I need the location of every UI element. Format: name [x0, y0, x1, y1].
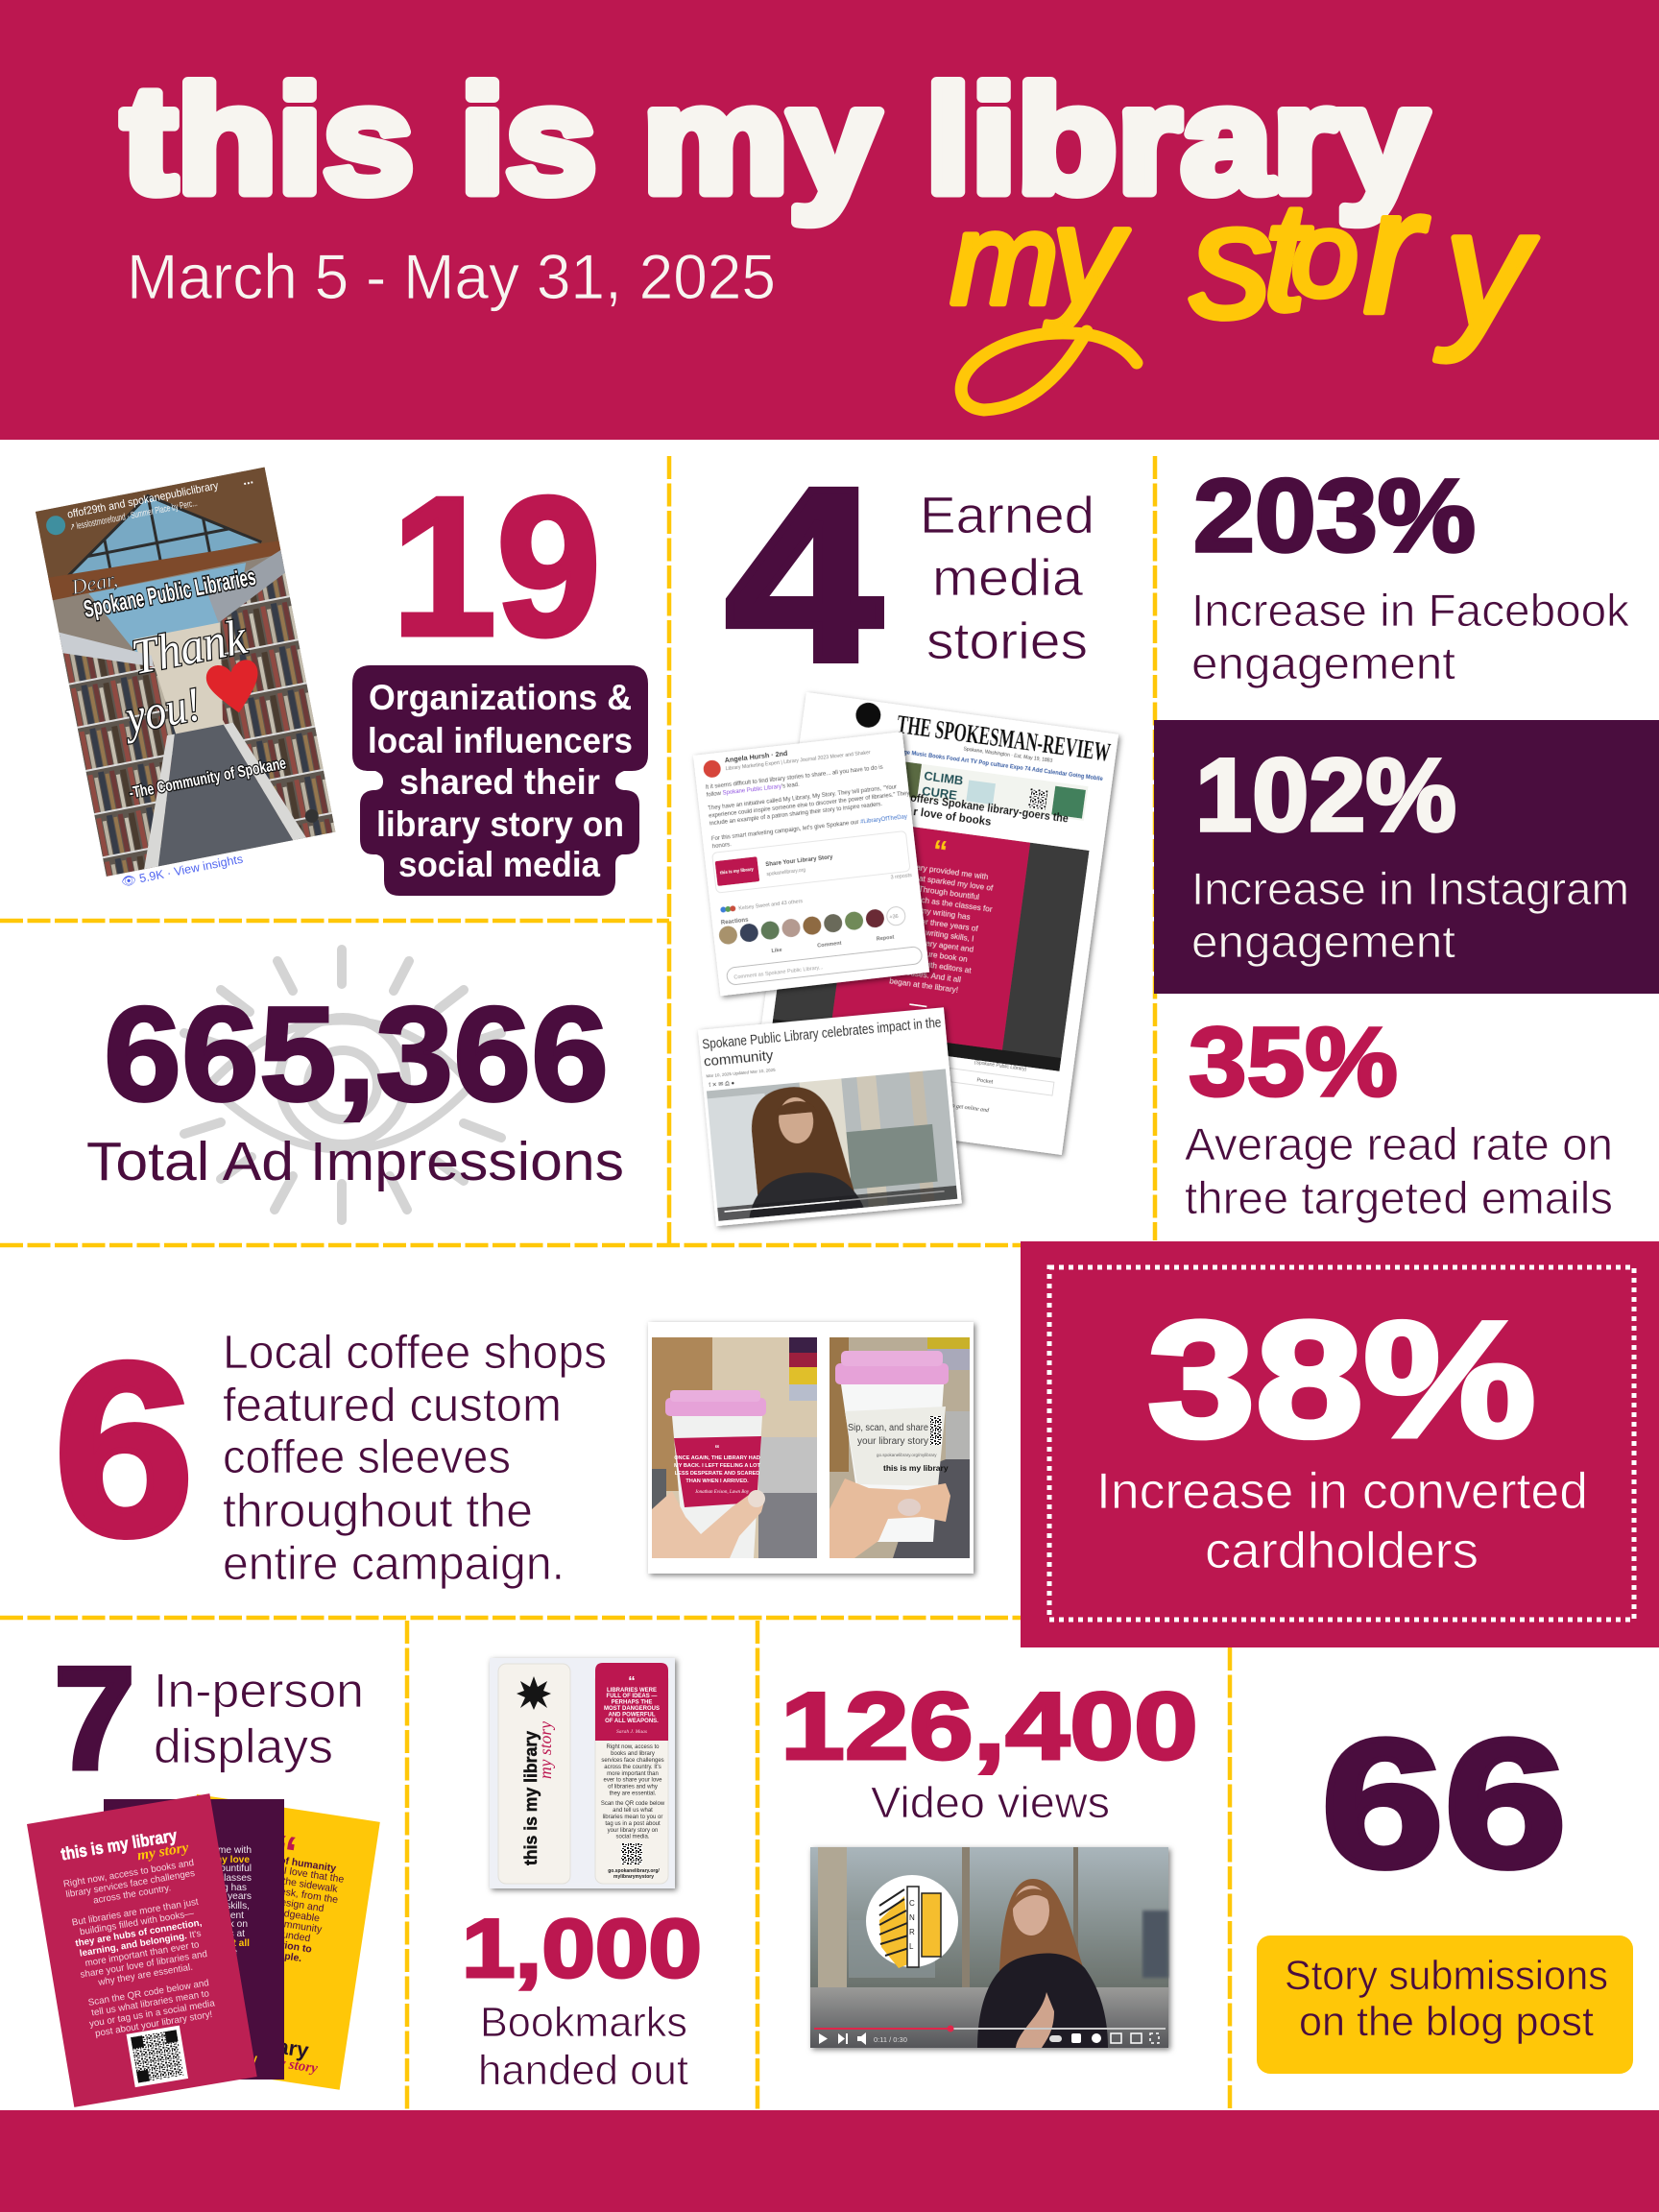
callout: organizations and influencers — [352, 665, 648, 896]
photo: white sleeve cup: your library story — [857, 1436, 928, 1447]
photo: crimson sleeve cup — [652, 1337, 817, 1558]
card: yellow quote: practical design and — [234, 1889, 325, 1914]
stat: total ad impressions: 665,366 — [104, 978, 609, 1129]
photo: bookmark: they are essential. — [610, 1791, 657, 1797]
media collage — [693, 692, 1118, 1226]
video still — [810, 1847, 1168, 2048]
photo: crimson sleeve cup: “ — [714, 1444, 720, 1455]
photo: bookmark: FULL OF IDEAS — — [607, 1694, 657, 1699]
card: crimson campaign: But libraries are more than just — [71, 1897, 200, 1929]
card: crimson campaign: post about your library story! — [94, 2009, 213, 2039]
social post: angela hursh: It it seems difficult to find library stories to share... all you have to do is — [706, 765, 883, 791]
social post: angela hursh: Comment — [817, 941, 842, 950]
panel: instagram story photo: Thank — [128, 610, 252, 685]
icon: central library logo: R — [909, 1928, 915, 1936]
card: purple quote: and a future book on — [158, 1919, 248, 1930]
footer band — [0, 2110, 1659, 2212]
card: crimson campaign: across the country. — [92, 1883, 172, 1907]
script subtitle: my story: m — [950, 186, 1058, 331]
callout: story submissions: on the blog post — [1299, 1999, 1594, 2045]
newspaper clipping: the spokesman-review: THE SPOKESMAN-REVIEW — [895, 709, 1112, 767]
panel: 102 percent instagram — [1154, 720, 1659, 994]
news video story: community — [703, 1047, 775, 1070]
photo: white sleeve cup: Sip, scan, and share — [848, 1423, 928, 1433]
newspaper clipping: the spokesman-review: The library provided me with — [890, 859, 989, 881]
script subtitle: my story: r — [1363, 153, 1429, 350]
stat: 4 earned media stories: 4 — [726, 438, 881, 712]
card: crimson campaign — [27, 1793, 257, 2107]
photo: bookmark: ever to share your love — [603, 1778, 662, 1784]
photo: bookmark: PERHAPS THE — [612, 1699, 652, 1705]
card: purple quote: for teens, my writing has — [141, 1883, 247, 1893]
card: purple quote: of honing my skills, — [167, 1901, 250, 1911]
stat: 6 coffee shops: featured custom — [223, 1380, 562, 1431]
social post: angela hursh: For this smart marketing campaign, let's give Spokane our #LibraryOfTheDay — [711, 814, 907, 842]
social post: angela hursh: Reactions — [721, 918, 749, 926]
newspaper clipping: the spokesman-review: Spokane Public Library invites you to get online and — [868, 1092, 990, 1114]
stat: 7 in-person displays — [54, 1637, 364, 1800]
social post: angela hursh — [693, 732, 930, 996]
icon: central library logo: N — [909, 1913, 915, 1922]
panel: 38 percent converted cardholders: 38% — [1147, 1287, 1536, 1472]
panel: instagram story photo: offof29th and spokanepubliclibrary — [66, 480, 220, 521]
social post: angela hursh: Comment as Spokane Public Library... — [733, 965, 824, 981]
photo: bookmark: your library story on — [608, 1828, 658, 1834]
panel: instagram story photo: Spokane Public Libraries — [82, 564, 258, 623]
newspaper clipping: the spokesman-review: found a literary agent and — [884, 933, 974, 954]
social post: angela hursh: honors. — [712, 842, 732, 850]
icon: star flower — [517, 1676, 551, 1710]
social post: angela hursh: They have an initiative called My Library, My Story. They tell patrons, "Your — [708, 784, 897, 812]
card: purple quote: started here — [185, 1947, 237, 1958]
qr code — [127, 2026, 188, 2087]
panel: instagram story photo: ... — [241, 471, 254, 488]
photo: bookmark: Right now, access to — [606, 1744, 660, 1750]
photo: bookmark: Scan the QR code below — [601, 1801, 665, 1807]
photo: crimson sleeve cup: Jonathan Evison, Lawn Boy — [695, 1490, 750, 1495]
dashed section dividers — [0, 456, 1230, 2110]
stat: 7 in-person displays: displays — [154, 1719, 333, 1773]
card: purple quote: big houses. And it all — [152, 1938, 250, 1949]
stat: 203 percent facebook: engagement — [1191, 637, 1455, 688]
stat: 6 coffee shops: 6 — [54, 1312, 194, 1587]
stat: 4 earned media stories: stories — [926, 613, 1088, 670]
social post: angela hursh: spokanelibrary.org — [766, 868, 806, 878]
stat: 1,000 bookmarks: Bookmarks — [480, 1999, 687, 2046]
newspaper clipping: the spokesman-review: Pocket — [976, 1077, 994, 1086]
newspaper clipping: the spokesman-review: (Spokane Public Library) — [974, 1060, 1027, 1072]
newspaper clipping: the spokesman-review — [750, 692, 1118, 1155]
newspaper clipping: the spokesman-review: books. Through bountiful — [893, 881, 980, 902]
card: yellow quote: staff, is a community — [230, 1911, 324, 1936]
photo: bookmark: go.spokanelibrary.org/ — [608, 1868, 660, 1874]
photo: speaker — [977, 1879, 1108, 2048]
photo: bookmark: AND POWERFUL — [609, 1713, 656, 1719]
photo: bookmark: MOST DANGEROUS — [604, 1706, 660, 1712]
callout: organizations and influencers: social media — [398, 845, 600, 884]
icon: central library logo — [866, 1875, 958, 1968]
newspaper clipping: the spokesman-review: family celebration. Simply tag — [865, 1109, 935, 1125]
card: yellow quote: the knowledgeable — [235, 1901, 321, 1925]
newspaper clipping: the spokesman-review: big houses. And it all — [889, 966, 962, 984]
card: crimson campaign: learning, and belonging. It's — [79, 1929, 202, 1960]
stat: 1,000 bookmarks — [462, 1903, 702, 2094]
card: crimson campaign: this is my library — [60, 1826, 179, 1863]
newspaper clipping: the spokesman-review: YESSENIA — [903, 1016, 931, 1024]
photo: bookmark: of libraries and why — [608, 1784, 658, 1790]
icon: central library logo: C — [909, 1899, 915, 1908]
panel: instagram story photo: Dear, — [68, 566, 119, 599]
photo: crimson sleeve cup: MY BACK. I LEFT FEELING A LOT — [674, 1463, 761, 1469]
script subtitle: my story: o — [1291, 188, 1358, 322]
social post: angela hursh: follow Spokane Public Library's lead. — [706, 782, 800, 799]
title: this is my library: this is my library — [122, 56, 1428, 225]
callout: story submissions: Story submissions — [1285, 1953, 1608, 1999]
card: purple quote: a space that sparked my love — [113, 1855, 250, 1865]
stat: 35 percent email read rate: three targeted emails — [1185, 1172, 1613, 1223]
social post: angela hursh: include an example of a patron sharing their story to inspire readers. — [709, 802, 883, 827]
callout: story submissions — [1257, 1936, 1633, 2074]
card: yellow quote: my story — [267, 2054, 319, 2077]
card: yellow quote: library, from the sidewalk — [228, 1867, 339, 1895]
stat: 203 percent facebook — [1191, 457, 1630, 688]
card: yellow quote: are a spark of humanity — [224, 1846, 337, 1875]
card: crimson campaign: share your love of libraries and — [80, 1949, 208, 1981]
photo: bookmark: services face challenges — [601, 1758, 664, 1764]
display cards — [27, 1793, 380, 2107]
script subtitle: my story: t — [1263, 170, 1311, 342]
news video story: Mar 10, 2025 Updated Mar 10, 2025 — [706, 1068, 776, 1078]
header band — [0, 0, 1659, 440]
card: crimson campaign: they are hubs of connection, — [75, 1917, 203, 1949]
card: crimson campaign: why they are essential. — [97, 1962, 194, 1988]
newspaper clipping: the spokesman-review: CLIMB — [923, 768, 964, 788]
news video story: Spokane Public Library celebrates impact in the — [702, 1015, 942, 1053]
video player controls: 0:11 / 0:30 — [874, 2035, 907, 2044]
stat: 1,000 bookmarks: handed out — [478, 2047, 688, 2094]
social post: angela hursh: +36 — [889, 914, 899, 921]
card: purple quote: of books. Through bountiful — [133, 1863, 252, 1874]
card: yellow quote — [156, 1794, 380, 2090]
photo: bookmark: across the country. It's — [604, 1765, 661, 1770]
newspaper clipping: the spokesman-review: Stage Music Books Food Art TV Pop culture Expo 74 Add Calendar Going Mobile — [895, 748, 1103, 782]
photo: bookmark: my story — [536, 1721, 555, 1779]
newspaper clipping: the spokesman-review: Spokane, Washington · Est. May 19, 1883 — [963, 746, 1053, 764]
card: yellow quote: library — [243, 2029, 311, 2062]
script subtitle: my story — [950, 153, 1538, 410]
panel: 102 percent instagram: Increase in Instagram — [1191, 863, 1629, 914]
script subtitle: my story: y — [1435, 176, 1538, 363]
card: crimson campaign: library services face challenges — [65, 1868, 196, 1900]
stat: 4 earned media stories: Earned — [920, 487, 1094, 544]
photo: bookmark: libraries mean to you or — [603, 1815, 662, 1820]
stat: 35 percent email read rate: Average read rate on — [1185, 1118, 1613, 1169]
newspaper clipping: the spokesman-review: began at the library! — [889, 976, 959, 995]
photo: bookmark: social media. — [615, 1834, 650, 1839]
card: purple quote — [104, 1799, 284, 2080]
social post: angela hursh: experience could inspire someone else to discover the power of libraries." They — [709, 791, 910, 820]
photo: coffee cups — [648, 1322, 974, 1574]
photo: bookmark: tag us in a post about — [605, 1821, 661, 1827]
stat: 4 earned media stories: media — [932, 549, 1084, 607]
stat: 6 coffee shops: entire campaign. — [223, 1538, 565, 1590]
card: crimson campaign: Right now, access to books and — [62, 1858, 195, 1890]
caption: view insights: 👁 5.9K · View insights — [120, 853, 244, 889]
newspaper clipping: the spokesman-review: teens, my writing has — [897, 903, 971, 922]
script subtitle: my story: y — [1044, 178, 1129, 333]
news video story: f ✕ ✉ ⎙ ● — [709, 1080, 735, 1089]
card: purple quote: The library provided me with — [129, 1845, 252, 1856]
card: yellow quote: in our towns. I love that the — [224, 1856, 345, 1886]
stat: 7 in-person displays: 7 — [54, 1637, 135, 1800]
stat: 203 percent facebook: Increase in Facebook — [1191, 585, 1630, 636]
photo: bookmark: more important than — [607, 1771, 659, 1777]
callout: organizations and influencers: Organizations & — [369, 678, 632, 717]
social post: angela hursh: this is my library — [720, 867, 755, 876]
stat: 203 percent facebook: 203% — [1193, 457, 1476, 573]
photo: bookmark — [490, 1658, 675, 1888]
photo: bookmark: Sarah J. Maas — [616, 1729, 647, 1735]
photo: bookmark: this is my library — [520, 1730, 541, 1865]
stat: 6 coffee shops — [54, 1312, 607, 1590]
newspaper clipping: the spokesman-review: “ — [930, 834, 950, 868]
card: yellow quote: with intention to — [233, 1933, 313, 1956]
stat: 126,400 video views: Video views — [871, 1778, 1110, 1827]
stat: 1,000 bookmarks: 1,000 — [462, 1903, 702, 1995]
stat: 126,400 video views — [781, 1672, 1198, 1827]
panel: instagram story photo: -The Community of Spokane — [128, 754, 288, 803]
newspaper clipping: the spokesman-review: r love of books — [912, 806, 992, 829]
newspaper clipping: the spokesman-review: have a picture book on — [888, 945, 969, 964]
card: crimson campaign: more important than ever to — [84, 1939, 201, 1969]
stat: 35 percent email read rate: 35% — [1189, 1007, 1398, 1117]
newspaper clipping: the spokesman-review: grown. After three years of — [886, 912, 979, 933]
card: purple quote: programs, such as the classes — [119, 1873, 252, 1884]
photo: crimson sleeve cup: ONCE AGAIN, THE LIBRARY HAD — [674, 1455, 760, 1461]
newspaper clipping: the spokesman-review: honing my writing skills, I — [887, 924, 974, 944]
icon: central library logo: L — [909, 1942, 914, 1951]
script subtitle: my story: s — [1190, 170, 1272, 352]
newspaper clipping: the spokesman-review: submission with editors at — [881, 954, 973, 975]
callout: organizations and influencers: shared their — [399, 762, 600, 802]
card: purple quote: grown. After three years — [148, 1891, 252, 1902]
icon: eye — [184, 950, 501, 1220]
newspaper clipping: the spokesman-review: CURE — [921, 783, 958, 803]
panel: 102 percent instagram: engagement — [1191, 916, 1455, 967]
photo: bookmark: and tell us what — [613, 1808, 653, 1814]
card: crimson campaign: my story — [136, 1840, 190, 1863]
photo: bookmark: “ — [628, 1673, 636, 1690]
callout: organizations and influencers: local influencers — [368, 721, 633, 760]
social post: angela hursh: Like — [771, 948, 782, 954]
social post: angela hursh: 3 reposts — [890, 873, 912, 881]
panel: 38 percent converted cardholders: cardholders — [1205, 1523, 1479, 1579]
video player controls — [814, 2026, 1166, 2045]
photo: crimson sleeve cup: THAN WHEN I ARRIVED. — [685, 1479, 749, 1484]
stat: 4 earned media stories — [726, 438, 1094, 712]
stat: 126,400 video views: 126,400 — [781, 1672, 1198, 1779]
social post: angela hursh: Library Marketing Expert | Library Journal 2023 Mover and Shaker — [725, 750, 871, 772]
panel: 38 percent converted cardholders: Increase in converted — [1096, 1463, 1588, 1520]
photo: bookmark: LIBRARIES WERE — [607, 1688, 657, 1694]
stat: 35 percent email read rate — [1185, 1007, 1613, 1223]
panel: instagram story photo: you! — [117, 677, 204, 744]
card: purple quote: submission with editors at — [132, 1929, 245, 1939]
photo: bookmark: OF ALL WEAPONS. — [605, 1719, 659, 1724]
newspaper clipping: the spokesman-review: offers Spokane library-goers the — [909, 793, 1069, 826]
panel: 102 percent instagram: 102% — [1195, 736, 1456, 853]
social post: angela hursh: Repost — [877, 935, 895, 943]
photo: white sleeve cup — [830, 1337, 970, 1558]
stat: 6 coffee shops: throughout the — [223, 1485, 533, 1537]
panel: instagram story photo — [36, 468, 335, 889]
photo: white sleeve cup: go.spokanelibrary.org/mylibrary — [877, 1453, 937, 1457]
social post: angela hursh: Share Your Library Story — [765, 854, 833, 868]
panel: 38 percent converted cardholders — [1021, 1241, 1659, 1647]
campaign dates: March 5 - May 31, 2025 — [127, 241, 776, 312]
stat: 6 coffee shops: Local coffee shops — [223, 1327, 607, 1379]
card: yellow quote: serve people. — [237, 1943, 302, 1964]
photo: crimson sleeve cup: LESS DESPERATE AND SCARED — [675, 1471, 759, 1477]
photo: white sleeve cup: this is my library — [883, 1463, 949, 1473]
photo: bookmark: books and library — [611, 1751, 655, 1757]
stat: 7 in-person displays: In-person — [154, 1664, 364, 1718]
panel: instagram story photo: ↗ lesslostmorefound · Summer Place by Perc... — [69, 498, 198, 533]
card: yellow quote: to the front desk, from the — [224, 1877, 339, 1906]
callout: organizations and influencers: library story on — [376, 805, 624, 844]
card: crimson campaign: Scan the QR code below and — [87, 1978, 210, 2008]
photo: bookmark: mylibrarymystory — [613, 1874, 654, 1880]
social post: angela hursh: Angela Hursh · 2nd — [724, 749, 788, 764]
card: purple quote: y — [251, 2052, 257, 2065]
card: yellow quote: built and funded — [238, 1922, 311, 1944]
newspaper clipping: the spokesman-review: programs such as the classes for — [878, 890, 993, 914]
stat: total ad impressions — [86, 978, 624, 1192]
news video story — [698, 1007, 962, 1226]
stat: 66: 66 — [1321, 1702, 1567, 1906]
card: crimson campaign: buildings filled with books— — [79, 1909, 195, 1937]
stat: total ad impressions: Total Ad Impressions — [86, 1131, 624, 1192]
stat: 19: 19 — [392, 456, 601, 677]
card: purple quote: I found an agent — [173, 1911, 244, 1921]
card: crimson campaign: you or tag us in a social media — [88, 1998, 216, 2030]
card: crimson campaign: tell us what libraries mean to — [90, 1988, 210, 2019]
social post: angela hursh: Kelsey Sweet and 43 others — [738, 899, 804, 912]
card: yellow quote: “ — [270, 1826, 301, 1880]
newspaper clipping: the spokesman-review: a photo, or video, is up to you. — [864, 1118, 935, 1134]
newspaper clipping: the spokesman-review: a space that sparked my love of — [882, 869, 994, 893]
stat: 6 coffee shops: coffee sleeves — [223, 1431, 511, 1483]
